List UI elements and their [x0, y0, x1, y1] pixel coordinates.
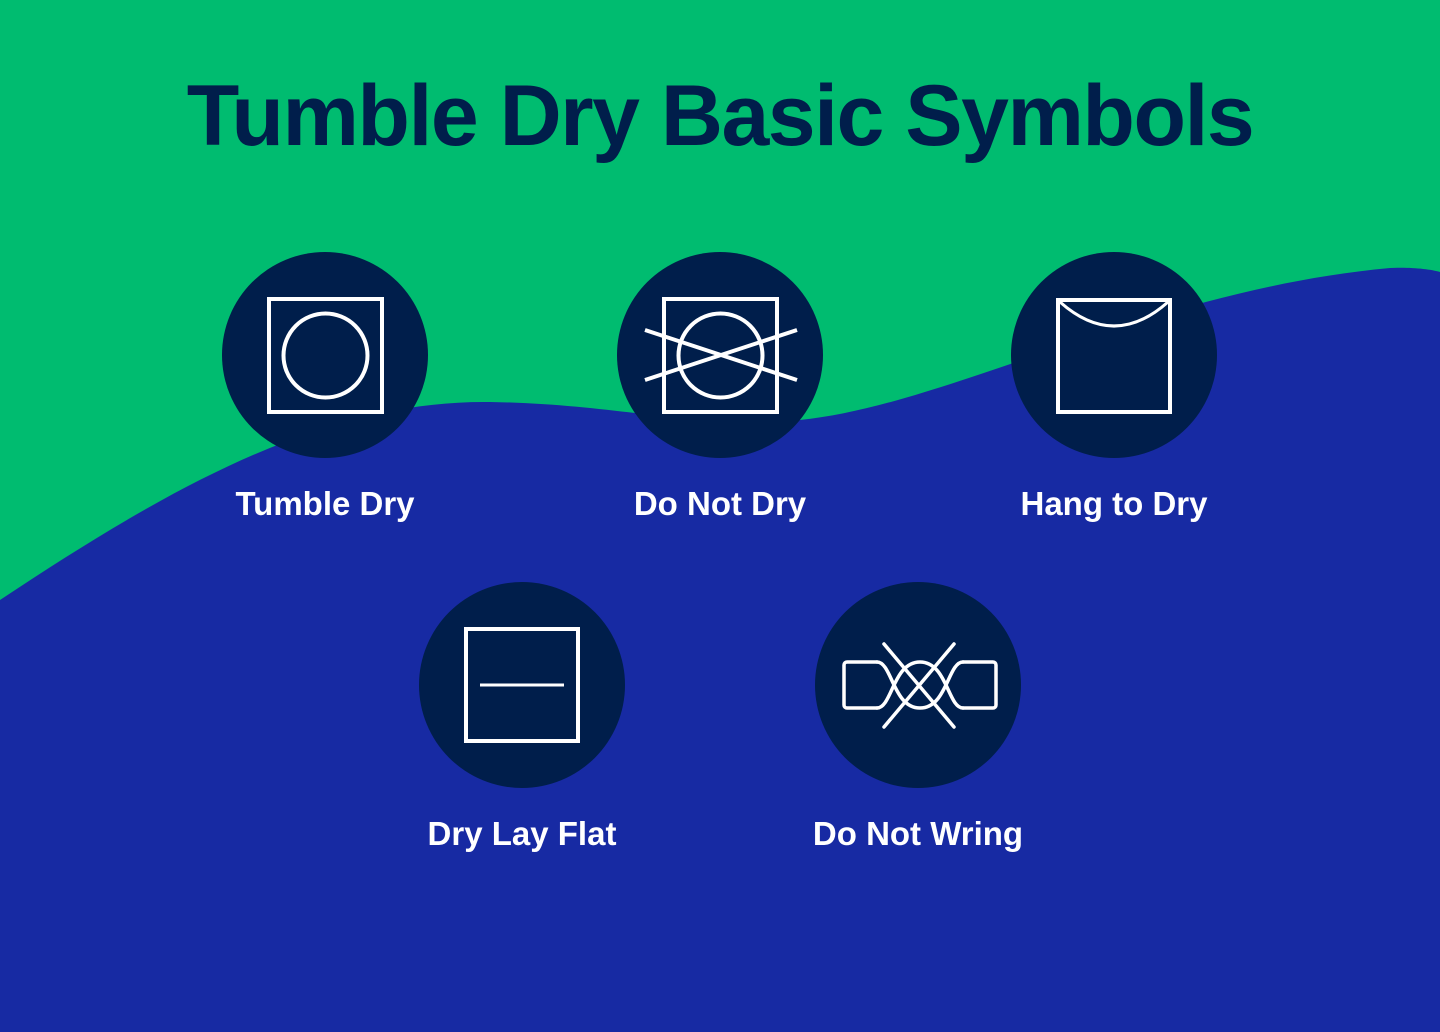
icon: dry lay flat — [419, 582, 625, 788]
icon: tumble dry — [222, 252, 428, 458]
label: do not dry: Do Not Dry — [634, 485, 806, 522]
icon: do not wring — [815, 582, 1021, 788]
title: Tumble Dry Basic Symbols — [187, 68, 1253, 164]
label: dry lay flat: Dry Lay Flat — [428, 815, 616, 852]
icon: hang to dry — [1011, 252, 1217, 458]
label: do not wring: Do Not Wring — [813, 815, 1023, 852]
label: tumble dry: Tumble Dry — [235, 485, 415, 522]
icon: do not dry — [617, 252, 823, 458]
label: hang to dry: Hang to Dry — [1020, 485, 1208, 522]
